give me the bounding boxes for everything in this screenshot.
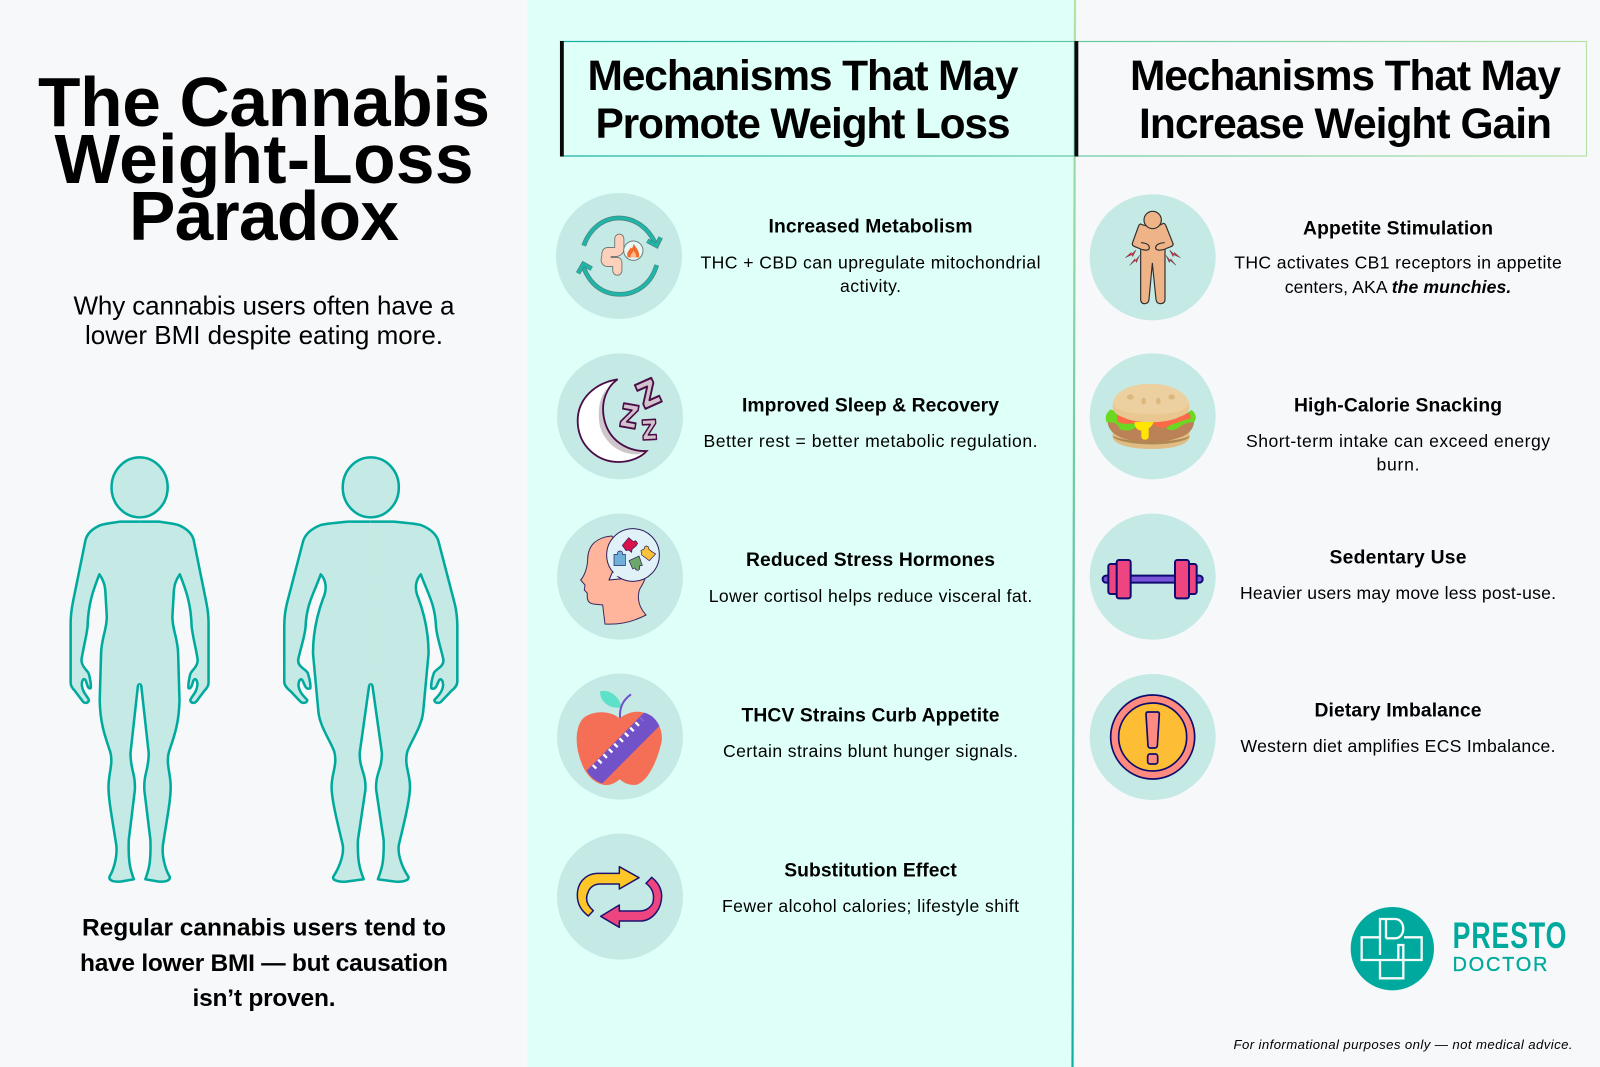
heading: weight gain mechanisms: Increase Weight Gain [1139, 101, 1552, 148]
card: dietary imbalance [1090, 674, 1556, 800]
description: Lower cortisol helps reduce visceral fat. [709, 586, 1032, 606]
description: Certain strains blunt hunger signals. [723, 741, 1018, 761]
title: THCV Strains Curb Appetite [742, 706, 1000, 726]
description: Better rest = better metabolic regulation. [704, 431, 1038, 451]
card: increased metabolism [556, 193, 1040, 319]
takeaway text: Regular cannabis users tend to [82, 914, 446, 942]
title: The Cannabis [38, 63, 490, 141]
wordmark [1452, 915, 1566, 976]
panel: weight loss background [528, 0, 1074, 1067]
description: activity. [840, 276, 901, 296]
logo mark [1351, 907, 1434, 990]
description: Western diet amplifies ECS Imbalance. [1240, 736, 1556, 756]
wordmark: PRESTO [1453, 915, 1566, 956]
wordmark: DOCTOR [1452, 954, 1548, 976]
heading: weight loss mechanisms: Promote Weight Loss [596, 101, 1010, 148]
description: Short-term intake can exceed energy [1246, 431, 1550, 451]
icon: burger [1090, 353, 1216, 479]
logo: presto doctor [1351, 907, 1566, 990]
description: Fewer alcohol calories; lifestyle shift [722, 896, 1019, 916]
column divider [1072, 0, 1075, 1067]
icon: swap arrows [557, 834, 683, 960]
figure: thinner body [71, 457, 209, 882]
heading: weight gain mechanisms: Mechanisms That May [1130, 53, 1561, 100]
icon: warning badge [1090, 674, 1216, 800]
subtitle: lower BMI despite eating more. [85, 320, 443, 350]
card: sedentary use [1090, 514, 1556, 640]
title: Paradox [129, 177, 399, 255]
title: Reduced Stress Hormones [746, 550, 995, 571]
title: Sedentary Use [1330, 548, 1467, 568]
subtitle: Why cannabis users often have a [74, 290, 455, 320]
card: substitution effect [557, 834, 1019, 960]
title [38, 63, 490, 255]
icon: moon and z's [557, 353, 683, 479]
title: Dietary Imbalance [1314, 700, 1482, 722]
description: THC activates CB1 receptors in appetite [1234, 252, 1562, 272]
title: Appetite Stimulation [1303, 218, 1493, 240]
takeaway text: isn’t proven. [192, 985, 336, 1012]
heading: weight loss mechanisms [560, 41, 1074, 156]
description [1246, 431, 1550, 474]
takeaway text [80, 914, 448, 1012]
icon: person holding stomach [1090, 194, 1216, 320]
title: Substitution Effect [784, 860, 957, 882]
description: Heavier users may move less post-use. [1240, 583, 1556, 603]
card: thcv strains [557, 674, 1018, 800]
card: appetite stimulation [1090, 194, 1562, 320]
description: THC + CBD can upregulate mitochondrial [700, 252, 1040, 272]
heading: weight gain mechanisms [1074, 41, 1586, 156]
figure: larger body [284, 457, 457, 882]
title: Weight-Loss [54, 120, 474, 198]
description: centers, AKA the munchies. [1285, 277, 1511, 297]
icon: head with puzzle pieces [557, 514, 683, 640]
panel: paradox intro [38, 63, 490, 1012]
description [700, 252, 1040, 296]
card: reduced stress [557, 514, 1032, 640]
icon: barbell [1090, 514, 1216, 640]
icon: apple with tape measure [557, 674, 683, 800]
disclaimer: For informational purposes only — not medical advice. [1234, 1037, 1572, 1052]
heading: weight loss mechanisms: Mechanisms That May [588, 53, 1019, 100]
card: improved sleep [557, 353, 1038, 479]
icon: metabolism cycle [556, 193, 682, 319]
title: Increased Metabolism [768, 216, 972, 238]
takeaway text: have lower BMI — but causation [80, 950, 448, 977]
title: Improved Sleep & Recovery [742, 396, 999, 416]
title: High-Calorie Snacking [1294, 396, 1502, 416]
description [1234, 252, 1562, 297]
description: burn. [1376, 454, 1420, 474]
subtitle [74, 290, 455, 350]
card: high-calorie snacking [1090, 353, 1550, 479]
